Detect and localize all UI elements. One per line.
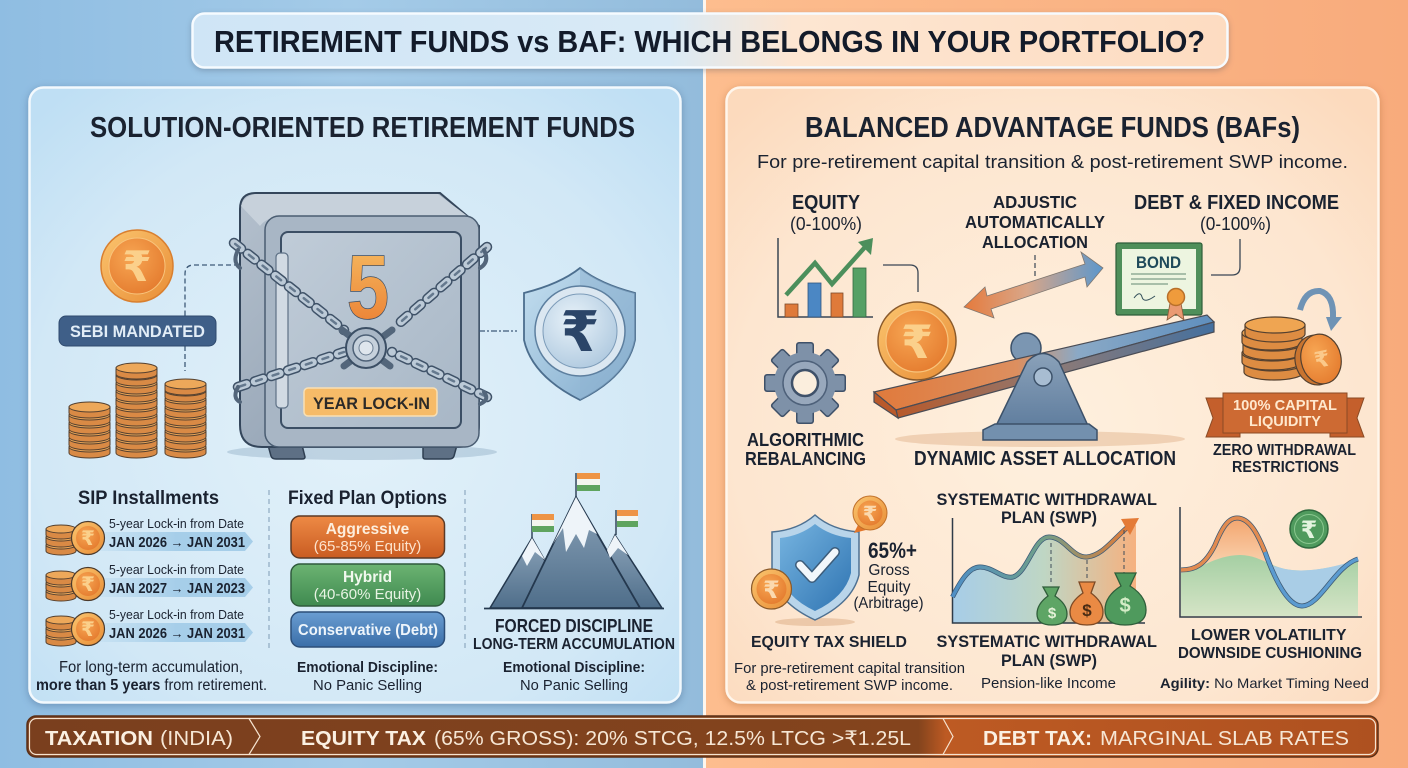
- SIP row 2: 5-year Lock-in from Date: [109, 562, 244, 577]
- column: lower volatility: Agility: No Market Timing Need: [1160, 675, 1369, 691]
- column: forced discipline: LONG-TERM ACCUMULATION: [473, 636, 675, 653]
- label: dynamic asset allocation: DYNAMIC ASSET ALLOCATION: [914, 448, 1176, 470]
- column: forced discipline: Emotional Discipline:: [503, 659, 645, 676]
- button: conservative: Conservative (Debt): [298, 622, 438, 639]
- ribbon: capital liquidity: 100% CAPITAL: [1233, 397, 1337, 414]
- label: algorithmic rebalancing: ALGORITHMIC: [747, 430, 864, 450]
- label: debt and fixed income: [1134, 192, 1339, 234]
- icon: large rupee coin: [878, 302, 956, 380]
- background: retirement side: [0, 0, 703, 768]
- label: adjustic automatically allocation: AUTOMATICALLY: [965, 212, 1105, 232]
- column: fixed plan options: Fixed Plan Options: [288, 488, 447, 509]
- note: long-term accumulation: For long-term accumulation,: [59, 659, 243, 676]
- column: lower volatility: LOWER VOLATILITY: [1191, 627, 1347, 644]
- icon: equity growth chart: [778, 238, 873, 317]
- SIP row 3: [46, 607, 253, 646]
- icon: rupee coin: [101, 230, 173, 302]
- button: aggressive: [291, 516, 444, 558]
- tax segment: taxation india: TAXATION: [45, 728, 153, 750]
- icon: seesaw: [874, 315, 1214, 447]
- SIP row 2: ₹: [81, 572, 95, 596]
- column: lower volatility: [1160, 507, 1369, 691]
- column: equity tax shield: For pre-retirement capital transition: [734, 660, 965, 677]
- stat: 65 percent gross equity: Gross: [868, 562, 910, 579]
- column: systematic withdrawal plan: PLAN (SWP): [1001, 651, 1097, 670]
- button: hybrid: (40-60% Equity): [314, 586, 421, 603]
- icon: green rupee coin: [1290, 510, 1328, 548]
- column: equity tax shield: [734, 496, 965, 694]
- icon: coins with cycle arrow: ₹: [1312, 346, 1332, 374]
- icon: money bag green small: $: [1048, 605, 1057, 622]
- plate: year lock-in: YEAR LOCK-IN: [313, 394, 430, 413]
- column: equity tax shield: EQUITY TAX SHIELD: [751, 634, 907, 651]
- column: SIP installments: SIP Installments: [78, 488, 219, 509]
- button: hybrid: [291, 564, 444, 606]
- panel: solution-oriented retirement funds: [30, 88, 680, 702]
- stat: 65 percent gross equity: 65%+: [868, 538, 917, 563]
- column: systematic withdrawal plan: PLAN (SWP): [1001, 508, 1097, 527]
- note: long-term accumulation: more than 5 years from retirement.: [36, 677, 267, 694]
- label: adjustic automatically allocation: [965, 192, 1105, 252]
- icon: money bag orange: $: [1082, 601, 1092, 620]
- icon: rupee coin small: ₹: [763, 576, 780, 604]
- background: BAF side: [706, 0, 1408, 768]
- connector: safe to shield: [479, 330, 517, 332]
- SIP row 3: 5-year Lock-in from Date: [109, 607, 244, 622]
- heading: balanced advantage funds: BALANCED ADVANTAGE FUNDS (BAFs): [805, 112, 1300, 144]
- SIP row 3: ₹: [81, 617, 95, 641]
- icon: rupee speech coin: ₹: [863, 502, 877, 526]
- label: zero withdrawal restrictions: RESTRICTIONS: [1232, 459, 1339, 476]
- label: zero withdrawal restrictions: ZERO WITHDRAWAL: [1213, 442, 1356, 459]
- icon: money bag green small: [1037, 587, 1067, 625]
- label: algorithmic rebalancing: REBALANCING: [745, 449, 866, 469]
- icon: rupee shield: [524, 268, 635, 400]
- SIP row 2: [46, 562, 253, 601]
- label: equity: EQUITY: [792, 192, 861, 214]
- badge: SEBI mandated: [59, 316, 216, 346]
- label: equity: (0-100%): [790, 214, 862, 234]
- column: SIP installments: [36, 488, 267, 694]
- icon: money bag green large: [1105, 573, 1146, 625]
- icon: locked safe: [227, 193, 497, 460]
- combination dial: [346, 328, 386, 368]
- label: debt and fixed income: (0-100%): [1200, 214, 1271, 234]
- icon: gear: [764, 342, 846, 424]
- icon: rupee coin small: [752, 569, 792, 609]
- tax segment: debt tax: DEBT TAX:: [983, 728, 1092, 750]
- tax segment: equity tax: (65% GROSS): 20% STCG, 12.5% LTCG >₹1.25L: [434, 728, 911, 750]
- label: zero withdrawal restrictions: [1213, 442, 1356, 476]
- column: equity tax shield: & post-retirement SWP income.: [746, 677, 953, 694]
- icon: large rupee coin: ₹: [901, 315, 933, 369]
- chart: SWP income curve: [952, 518, 1145, 623]
- button: aggressive: Aggressive: [326, 521, 410, 538]
- arrow: two-way allocation: [964, 252, 1103, 318]
- SIP row 3: JAN 2026 → JAN 2031: [109, 626, 245, 642]
- icon: money bag green large: $: [1119, 595, 1131, 617]
- SIP row 1: JAN 2026 → JAN 2031: [109, 535, 245, 551]
- note: long-term accumulation: [36, 659, 267, 694]
- tax segment: equity tax: EQUITY TAX: [301, 728, 427, 750]
- button: hybrid: Hybrid: [343, 569, 392, 586]
- column: systematic withdrawal plan: SYSTEMATIC WITHDRAWAL: [936, 490, 1157, 509]
- icon: coins with cycle arrow: [1242, 291, 1346, 389]
- title banner: [192, 14, 1228, 68]
- icon: coin stacks: [69, 363, 206, 458]
- SIP row 1: ₹: [81, 526, 95, 550]
- icon: tax shield: [772, 515, 859, 626]
- label: debt and fixed income: DEBT & FIXED INCOME: [1134, 192, 1339, 214]
- number: 5: 5: [347, 238, 389, 338]
- label: adjustic automatically allocation: ALLOCATION: [982, 232, 1088, 252]
- heading: retirement funds: SOLUTION-ORIENTED RETIREMENT FUNDS: [90, 112, 635, 144]
- icon: money bag orange: [1070, 582, 1103, 625]
- icon: bond certificate: [1116, 243, 1202, 320]
- ribbon: capital liquidity: LIQUIDITY: [1249, 413, 1321, 430]
- button: conservative: [291, 612, 444, 647]
- tax segment: taxation india: [45, 728, 233, 750]
- tax segment: taxation india: (INDIA): [160, 728, 233, 750]
- column: forced discipline: No Panic Selling: [520, 677, 628, 694]
- icon: rupee shield: ₹: [561, 300, 599, 365]
- subheading: For pre-retirement capital transition & post-retirement SWP income.: [757, 152, 1348, 172]
- chains: [234, 243, 487, 404]
- label: algorithmic rebalancing: [745, 430, 866, 469]
- panel: balanced advantage funds: [726, 88, 1378, 702]
- column: systematic withdrawal plan: [936, 490, 1157, 692]
- column: forced discipline: [473, 473, 675, 694]
- stat: 65 percent gross equity: Equity: [867, 579, 911, 596]
- note: emotional discipline: Emotional Discipline:: [297, 659, 438, 676]
- stat: 65 percent gross equity: [854, 538, 924, 612]
- column: fixed plan options: [288, 488, 447, 694]
- tax segment: debt tax: [983, 728, 1349, 750]
- plate: year lock-in: [304, 388, 437, 416]
- button: aggressive: (65-85% Equity): [314, 538, 421, 555]
- note: emotional discipline: No Panic Selling: [313, 677, 422, 694]
- icon: rupee coin: ₹: [122, 242, 152, 291]
- SIP row 1: [46, 516, 253, 555]
- column: lower volatility: DOWNSIDE CUSHIONING: [1178, 645, 1362, 662]
- ribbon: capital liquidity: [1206, 393, 1364, 437]
- icon: bond certificate: BOND: [1136, 254, 1181, 272]
- icon: green rupee coin: ₹: [1301, 516, 1317, 544]
- icon: rupee speech coin: [853, 496, 887, 533]
- SIP row 1: 5-year Lock-in from Date: [109, 516, 244, 531]
- chart: lower volatility curves: [1180, 507, 1362, 617]
- icon: mountain with flags: [484, 473, 664, 608]
- column: systematic withdrawal plan: SYSTEMATIC WITHDRAWAL: [936, 632, 1157, 651]
- column: systematic withdrawal plan: Pension-like Income: [981, 675, 1116, 692]
- stat: 65 percent gross equity: (Arbitrage): [854, 595, 924, 612]
- title banner: RETIREMENT FUNDS vs BAF: WHICH BELONGS IN YOUR PORTFOLIO?: [214, 24, 1205, 59]
- taxation bar: [27, 716, 1378, 757]
- connector: SEBI to safe: [185, 265, 239, 371]
- tax segment: debt tax: MARGINAL SLAB RATES: [1100, 728, 1349, 750]
- note: emotional discipline: [297, 659, 438, 694]
- SIP row 2: JAN 2027 → JAN 2023: [109, 581, 245, 597]
- column: forced discipline: FORCED DISCIPLINE: [495, 616, 653, 636]
- label: adjustic automatically allocation: ADJUSTIC: [993, 192, 1077, 212]
- badge: SEBI mandated: SEBI MANDATED: [70, 322, 205, 341]
- label: equity: [790, 192, 862, 234]
